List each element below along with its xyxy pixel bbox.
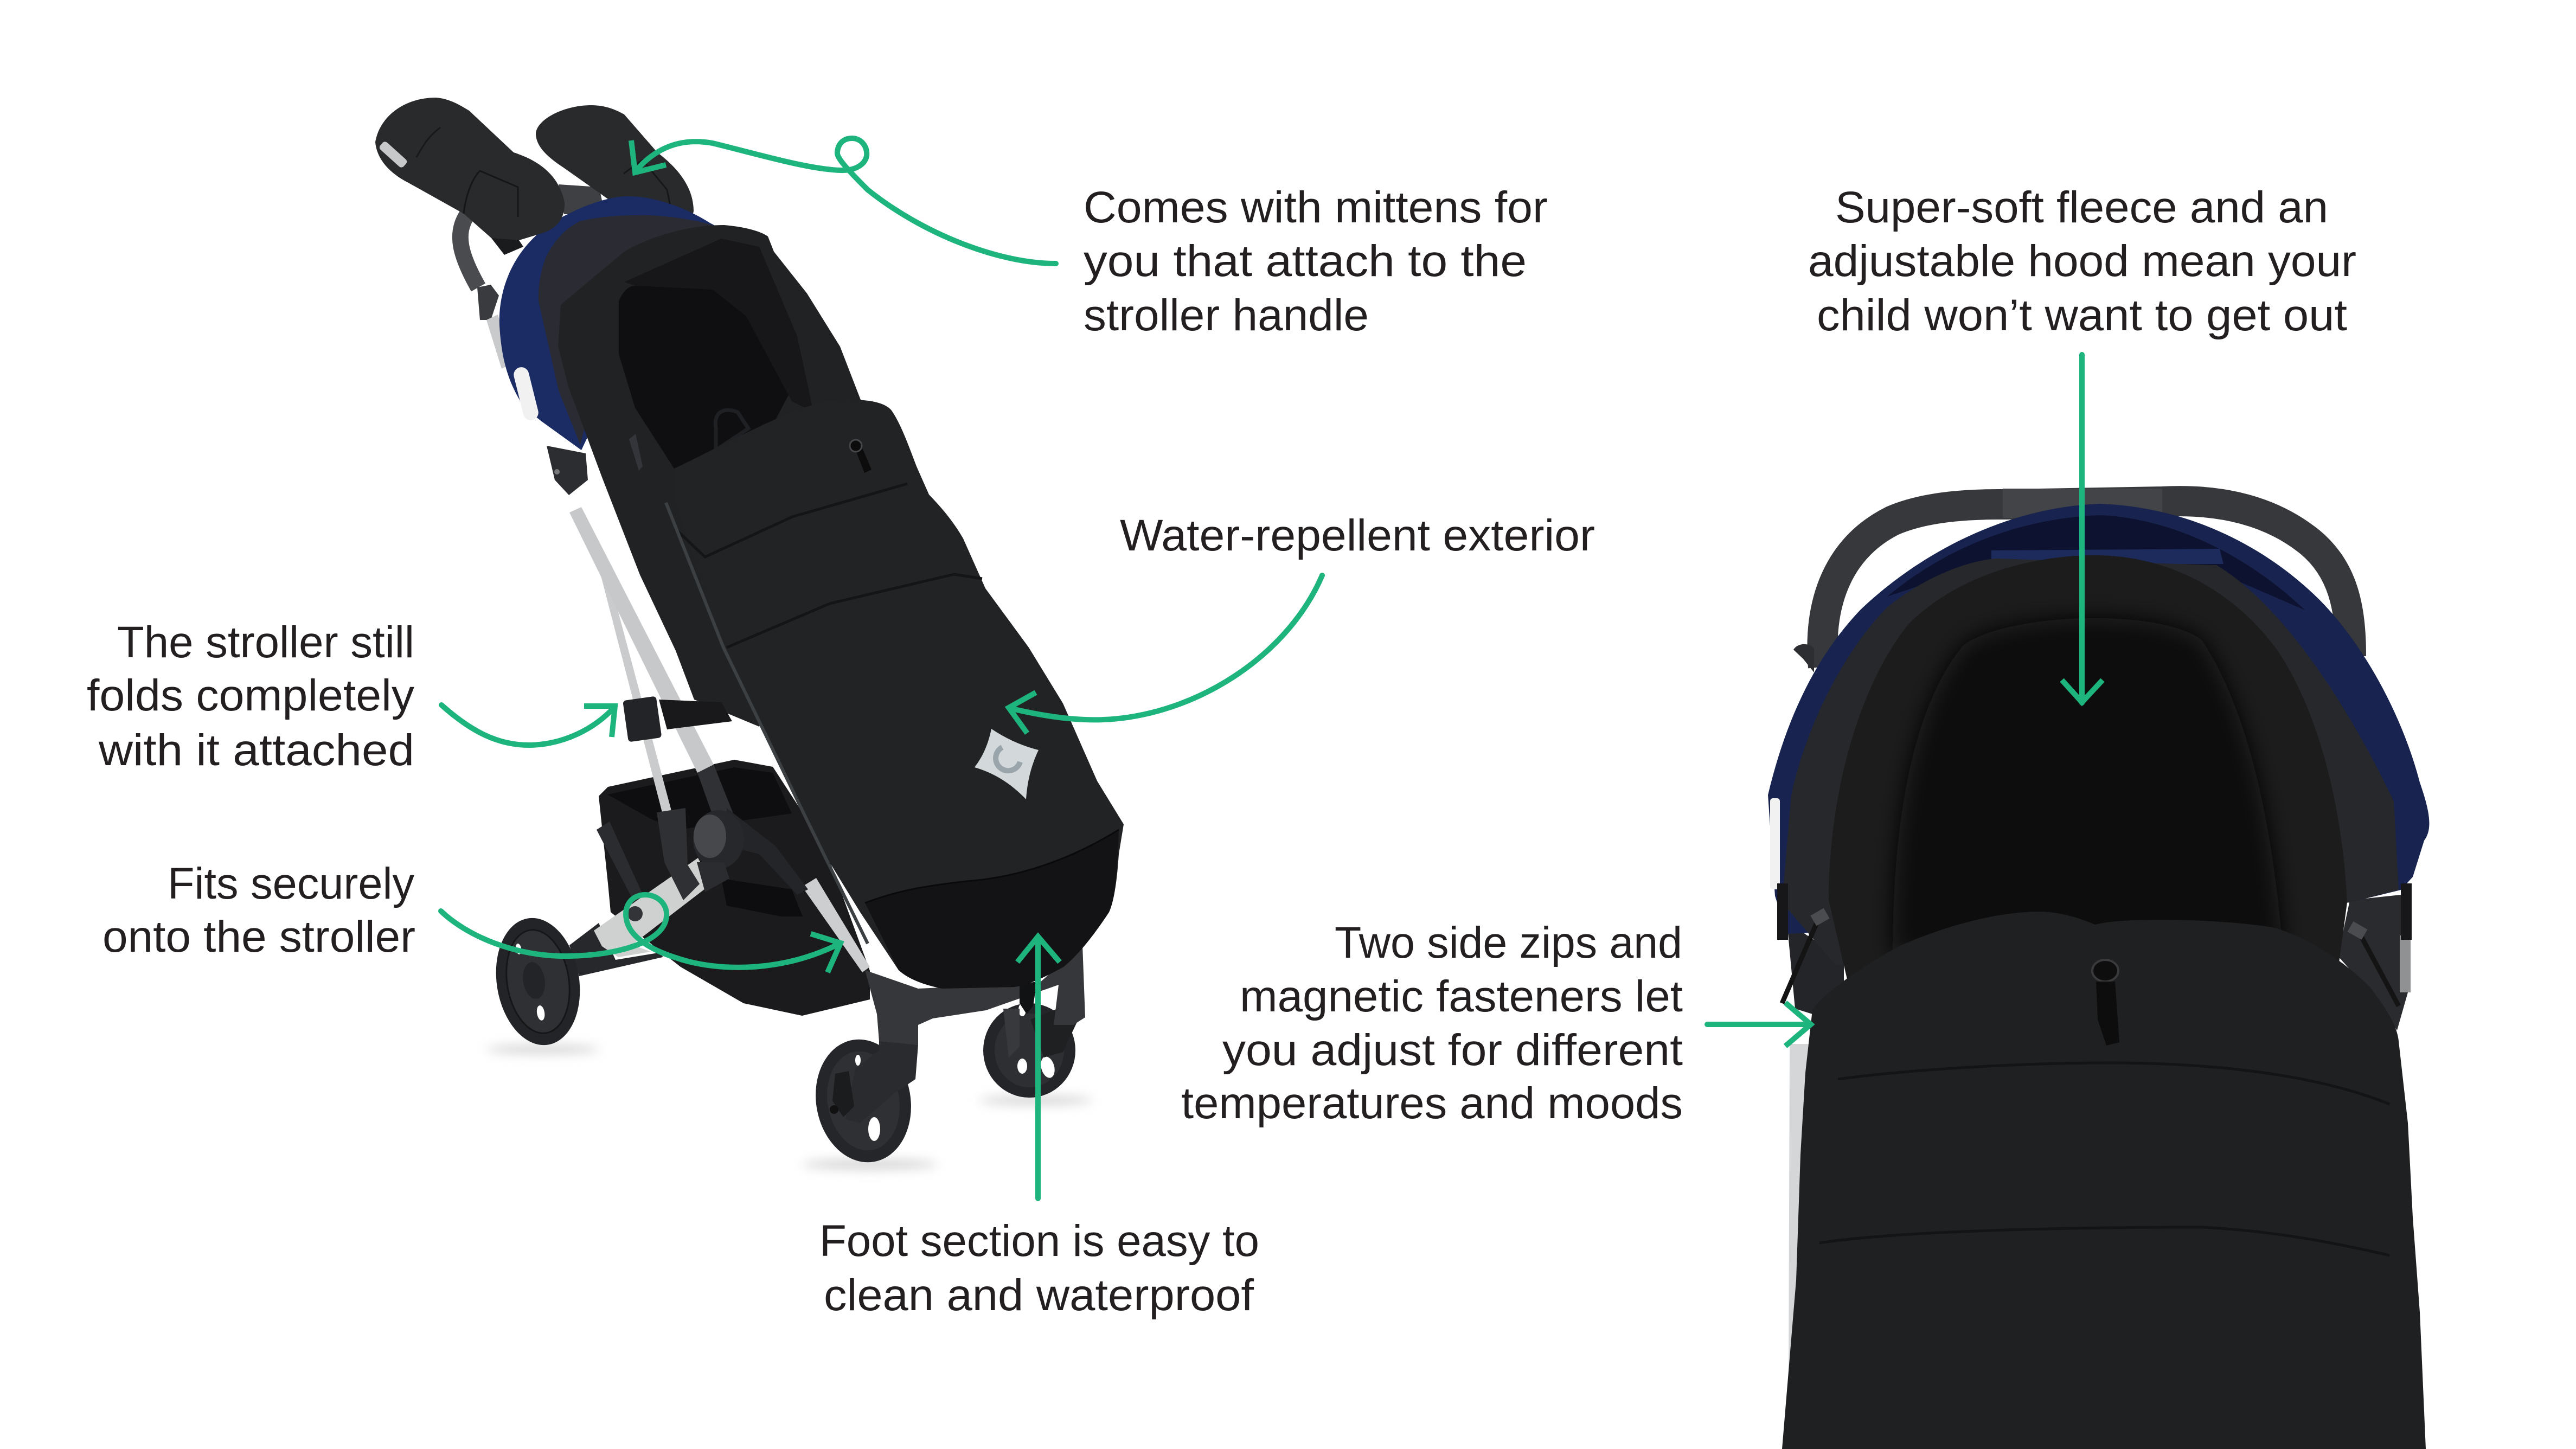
hood fleece: [1829, 555, 2347, 982]
label: fleece and hood: Super-soft fleece and an: [1835, 183, 2328, 232]
stroller handle: [1793, 489, 2351, 672]
muff body: [1782, 912, 2426, 1449]
mitten label: [378, 140, 408, 169]
arrow: side zips: [1707, 1003, 1811, 1046]
rear frame bar: [569, 858, 870, 976]
handle: [460, 184, 605, 369]
label: folds: folds completely: [87, 671, 414, 720]
brand tag: [975, 729, 1039, 799]
arrow: fits securely: [441, 895, 841, 972]
label: side zips: temperatures and moods: [1181, 1079, 1683, 1128]
canopy label: [512, 366, 540, 422]
label: mittens: you that attach to the: [1084, 236, 1527, 286]
arrow: water-repellent: [1009, 575, 1322, 733]
label: mittens: [1084, 183, 1548, 340]
basket: [597, 760, 870, 1016]
quilting seams: [1838, 1063, 2389, 1104]
arrow: folds: [441, 705, 615, 745]
canopy navy: [499, 196, 770, 450]
zip tab: [853, 440, 872, 473]
hinge joint: [693, 808, 808, 895]
label: fleece and hood: child won’t want to get out: [1817, 291, 2347, 340]
label: folds: The stroller still: [117, 618, 414, 667]
hinge block: [547, 446, 588, 495]
label: fleece and hood: [1808, 183, 2356, 340]
quilting seams: [675, 484, 907, 557]
arrow: fleece: [2062, 355, 2103, 703]
label: side zips: Two side zips and: [1335, 918, 1682, 967]
rear wheel: [487, 912, 589, 1051]
label: fits securely: Fits securely: [168, 859, 414, 908]
side zip strip: [666, 503, 868, 944]
left mitten: [375, 98, 565, 255]
photo: stroller with footmuff, side view: [375, 98, 1124, 1170]
side joints: [1787, 895, 2411, 1030]
label: mittens: Comes with mittens for: [1084, 183, 1548, 232]
label: mittens: stroller handle: [1084, 291, 1369, 340]
label: side zips: magnetic fasteners let: [1240, 972, 1683, 1021]
base and front leg: [865, 945, 1085, 1045]
silver rail: [1789, 1044, 1814, 1383]
label: fits securely: [102, 859, 415, 961]
right mitten: [536, 105, 694, 228]
photo: footmuff front close-up: [1768, 489, 2429, 1449]
silver fold tubes: [569, 507, 733, 900]
label: folds: with it attached: [98, 726, 414, 775]
canopy: [1768, 504, 2429, 965]
label: water-repellent: Water-repellent exterior: [1120, 511, 1595, 560]
lower footmuff body: [666, 400, 1124, 989]
foot section: [865, 830, 1119, 989]
label: foot section: clean and waterproof: [824, 1271, 1254, 1320]
label: foot section: [819, 1216, 1259, 1320]
hood and seat of footmuff: [558, 225, 862, 727]
side clips and cords: [1777, 883, 2412, 1006]
label: fleece and hood: adjustable hood mean your: [1808, 236, 2356, 286]
canopy label: [1770, 798, 1780, 889]
arrow: foot section: [1017, 937, 1060, 1198]
arrow: mittens: [631, 138, 1056, 264]
front wheel: [806, 1032, 920, 1170]
label: folds: [87, 618, 414, 775]
label: fits securely: onto the stroller: [102, 912, 415, 961]
zip puller: [2092, 960, 2118, 982]
wheel shadows: [486, 1045, 1093, 1169]
zip pull under footmuff: [1020, 982, 1037, 1014]
label: foot section: Foot section is easy to: [819, 1216, 1259, 1266]
label: side zips: [1181, 918, 1683, 1128]
label: side zips: you adjust for different: [1222, 1025, 1683, 1075]
back right wheel: [983, 1003, 1079, 1098]
